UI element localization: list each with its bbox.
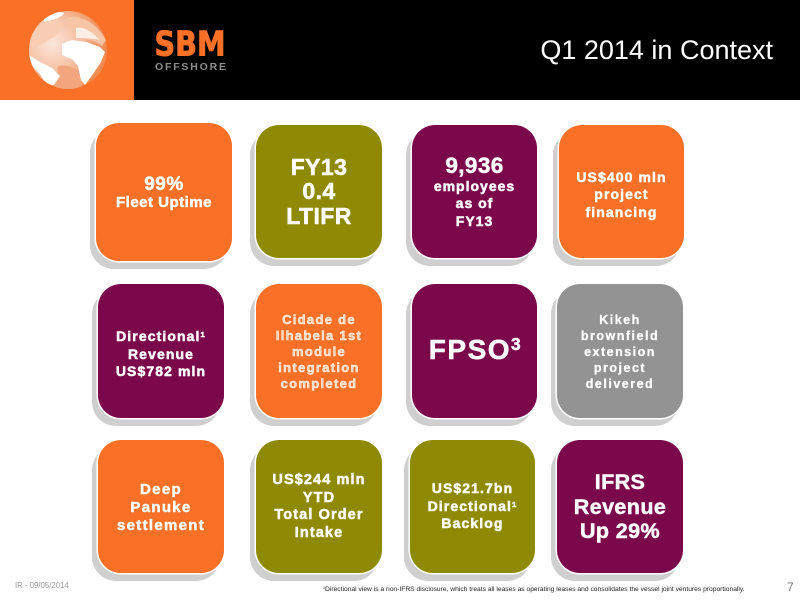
card: IFRS revenue: IFRS — [595, 470, 645, 494]
card: directional backlog: Directional1 — [428, 498, 517, 514]
card: LTIFR — [256, 125, 382, 258]
south america — [29, 55, 60, 85]
card: employees — [412, 125, 537, 258]
card: Kikeh brownfield: extension — [584, 345, 656, 359]
page number: 7 — [787, 580, 794, 594]
card: project financing: US$400 mln — [576, 168, 667, 184]
card: Kikeh brownfield: brownfield — [581, 329, 659, 343]
card: directional backlog — [410, 440, 535, 573]
card: Cidade de Ilhabela: completed — [281, 376, 357, 391]
card: Kikeh brownfield: project — [594, 361, 646, 375]
card: employees: as of — [456, 195, 493, 211]
greenland — [44, 12, 64, 22]
card: directional revenue: Directional1 — [116, 328, 206, 344]
card: project financing: project — [594, 186, 649, 202]
card: Deep Panuke settlement: Deep — [140, 481, 182, 498]
card: directional backlog: US$21.7bn — [432, 480, 513, 496]
card: Cidade de Ilhabela: integration — [278, 360, 360, 375]
card: 99% fleet uptime — [96, 123, 232, 261]
card: Cidade de Ilhabela — [256, 284, 382, 418]
card: LTIFR: FY13 — [291, 154, 347, 180]
card: employees: FY13 — [456, 212, 493, 228]
footer date: IR - 09/05/2014 — [15, 581, 69, 590]
card: IFRS revenue: Up 29% — [580, 519, 660, 543]
card: Deep Panuke settlement: Panuke — [130, 499, 192, 516]
card: directional revenue: US$782 mln — [116, 363, 206, 379]
card: employees: employees — [434, 178, 515, 194]
logo: SBM Offshore: OFFSHORE — [155, 61, 226, 73]
card: directional revenue — [98, 284, 224, 418]
card: directional backlog: Backlog — [441, 515, 504, 531]
card: total order intake: US$244 mln — [272, 472, 366, 488]
card: LTIFR: LTIFR — [286, 202, 352, 228]
card: IFRS revenue — [557, 440, 683, 573]
south atlantic shading — [56, 66, 84, 90]
card: Kikeh brownfield: delivered — [586, 377, 654, 391]
card: Deep Panuke settlement — [98, 440, 224, 573]
card: total order intake — [256, 440, 382, 573]
card: Cidade de Ilhabela: module — [292, 344, 346, 359]
card: LTIFR: 0.4 — [302, 178, 336, 204]
card: total order intake: Intake — [295, 524, 343, 540]
header: black banner — [0, 0, 800, 100]
card: FPSO: FPSO3 — [429, 334, 522, 365]
card: directional revenue: Revenue — [128, 346, 194, 362]
header: orange globe panel — [0, 0, 134, 100]
card: FPSO — [412, 284, 537, 418]
card: total order intake: YTD — [303, 490, 335, 506]
card: total order intake: Total Order — [274, 507, 364, 523]
card: Deep Panuke settlement: settlement — [117, 517, 205, 534]
card: project financing: financing — [585, 204, 658, 220]
europe and asia — [66, 17, 106, 46]
card: Cidade de Ilhabela: Ilhabela 1st — [276, 328, 362, 343]
card: Kikeh brownfield: Kikeh — [599, 313, 641, 327]
card: Kikeh brownfield — [557, 284, 683, 418]
card: Cidade de Ilhabela: Cidade de — [282, 312, 356, 327]
north america — [30, 20, 59, 46]
card: IFRS revenue: Revenue — [574, 494, 666, 518]
footnote: 1Directional view is a non-IFRS disclosure, which treats all leases as operating leases and consolidates the vessel joint ventures proportionally. — [323, 586, 745, 593]
card: employees: 9,936 — [445, 153, 504, 178]
card: 99% fleet uptime: 99% — [144, 174, 184, 195]
card: 99% fleet uptime: Fleet Uptime — [116, 194, 212, 211]
africa — [62, 40, 105, 85]
icon: globe — [29, 11, 107, 89]
card: project financing — [559, 125, 684, 258]
title: Q1 2014 in Context — [540, 35, 773, 65]
